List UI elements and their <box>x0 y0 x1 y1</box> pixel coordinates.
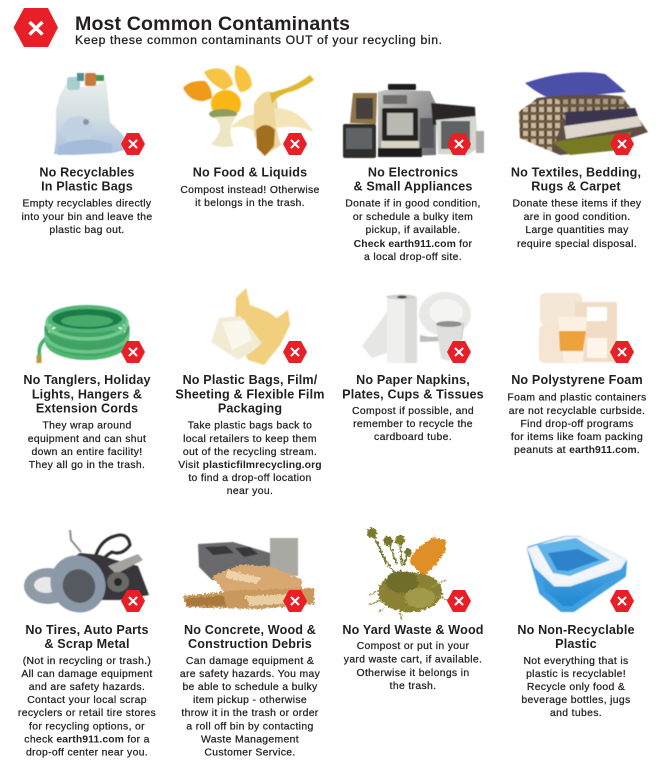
body text <box>345 198 481 263</box>
badge <box>283 590 307 612</box>
body text: Visit plasticfilmrecycling.org <box>178 460 322 471</box>
body text: down an entire facility! <box>32 447 142 458</box>
badge <box>283 133 307 155</box>
body text <box>28 421 146 471</box>
panel: no paper napkins, plates, cups and tissues <box>342 292 484 443</box>
panel: no tanglers, lights, hangers and cords <box>23 307 151 471</box>
body text: Donate these items if they <box>513 198 642 210</box>
body text: drop-off center near you. <box>26 748 148 759</box>
body text: All can damage equipment <box>21 669 153 680</box>
image: inflatable blue kiddie pool <box>529 538 625 609</box>
badge <box>447 590 471 612</box>
heading <box>175 373 325 416</box>
heading: In Plastic Bags <box>41 180 133 194</box>
image: tires and scrap auto parts <box>24 530 149 623</box>
image: coiled green hose <box>36 307 128 363</box>
heading: No Concrete, Wood & <box>184 623 316 637</box>
image: cinder block, brick and wood scraps <box>198 538 298 580</box>
body text: or schedule a bulky item <box>353 212 473 223</box>
body text: be able to schedule a bulky <box>182 682 318 693</box>
heading: Packaging <box>218 402 282 416</box>
heading <box>23 373 151 416</box>
heading: No Polystyrene Foam <box>511 373 643 387</box>
body text: Can damage equipment & <box>186 656 314 667</box>
body text: a local drop-off site. <box>364 252 462 263</box>
badge <box>121 341 145 363</box>
body text: into your bin and leave the <box>21 212 153 223</box>
badge <box>447 341 471 363</box>
heading: No Plastic Bags, Film/ <box>183 373 318 387</box>
badge <box>447 133 471 155</box>
image: paper towel roll, plates and cup <box>362 292 471 363</box>
body text: They wrap around <box>42 421 132 432</box>
body text: Otherwise it belongs in <box>357 668 469 679</box>
body text <box>18 656 156 759</box>
body text: for items like foam packing <box>511 432 643 443</box>
body text <box>352 406 474 443</box>
body text: Waste Management <box>201 735 299 746</box>
badge <box>121 590 145 612</box>
body text: They all go in the trash. <box>29 460 145 471</box>
body text: peanuts at earth911.com. <box>514 445 640 456</box>
panel: no yard waste and wood <box>342 528 484 692</box>
badge <box>610 341 634 363</box>
heading: No Tires, Auto Parts <box>25 623 149 637</box>
body text: Recycle only food & <box>527 682 625 693</box>
heading: No Textiles, Bedding, <box>511 166 641 180</box>
heading <box>517 623 635 651</box>
heading: Construction Debris <box>188 637 312 651</box>
image: grass clippings, weeds and leaf <box>367 528 448 620</box>
body text <box>180 185 320 209</box>
body text: yard waste cart, if available. <box>344 655 482 666</box>
body text: require special disposal. <box>517 239 637 250</box>
body text: beverage bottles, jugs <box>521 695 631 706</box>
panel: no non-recyclable plastic <box>517 538 635 719</box>
image: apple core, orange peels and banana peel <box>183 65 314 156</box>
image: folded blankets with blue pillow <box>519 72 648 155</box>
body text <box>507 393 647 456</box>
body text: pickup, if available. <box>366 225 460 236</box>
image: foam containers and cup <box>539 293 617 364</box>
body text <box>178 421 322 497</box>
body text: for recycling options, or <box>29 722 145 733</box>
heading: Sheeting & Flexible Film <box>175 387 325 401</box>
body text: Donate if in good condition, <box>345 198 481 210</box>
heading: Plates, Cups & Tissues <box>342 387 484 401</box>
body text <box>513 198 642 250</box>
body text: out of the recycling stream. <box>183 447 317 458</box>
body text: recyclers or retail tire stores <box>18 708 156 719</box>
heading: Extension Cords <box>36 402 138 416</box>
heading <box>342 373 484 401</box>
badge <box>283 341 307 363</box>
body text: are in good condition. <box>524 212 630 223</box>
heading: No Paper Napkins, <box>356 373 470 387</box>
body text: (Not in recycling or trash.) <box>23 656 151 667</box>
subtitle: Keep these common contaminants OUT of your recycling bin. <box>75 33 442 47</box>
heading: Plastic <box>555 637 597 651</box>
body text: a roll off bin by contacting <box>186 722 314 733</box>
body text: Compost if possible, and <box>352 406 474 417</box>
panel: no food and liquids <box>180 65 320 209</box>
body text: equipment and can shut <box>28 434 146 445</box>
heading <box>511 166 641 194</box>
header icon: red hexagon with X <box>14 8 58 47</box>
body text: Take plastic bags back to <box>188 421 312 432</box>
panel: no tires, auto parts and scrap metal <box>18 530 156 759</box>
body text: remember to recycle the <box>353 419 473 430</box>
heading: & Scrap Metal <box>44 637 130 651</box>
heading: No Recyclables <box>39 166 135 180</box>
panel: no recyclables in plastic bags <box>21 73 153 236</box>
panel: no plastic bags, film and flexible packaging <box>175 288 325 497</box>
body text: local retailers to keep them <box>183 434 317 445</box>
title: Most Common Contaminants <box>75 13 350 35</box>
body text: Find drop-off programs <box>521 419 633 430</box>
body text: Check earth911.com for <box>354 239 473 250</box>
heading: Rugs & Carpet <box>531 180 621 194</box>
badge <box>610 133 634 155</box>
body text: Empty recyclables directly <box>23 198 152 210</box>
body text: Compost instead! Otherwise <box>180 185 320 196</box>
body text <box>521 656 631 719</box>
body text: to find a drop-off location <box>188 473 312 484</box>
image: crumpled yellow and white plastic bags <box>211 288 290 365</box>
body text <box>344 641 482 692</box>
body text: plastic bag out. <box>49 225 125 236</box>
heading <box>25 623 149 651</box>
body text: check earth911.com for a <box>24 735 150 746</box>
image: wood scraps <box>183 565 314 609</box>
body text: near you. <box>227 486 273 497</box>
panel: no textiles, bedding, rugs and carpet <box>511 72 648 250</box>
body text: it belongs in the trash. <box>195 198 305 209</box>
heading: No Non-Recyclable <box>517 623 635 637</box>
heading <box>184 623 316 651</box>
body text: and tubes. <box>550 708 602 719</box>
body text: Not everything that is <box>523 656 629 667</box>
body text <box>180 656 321 759</box>
panel: no polystyrene foam <box>507 293 647 456</box>
body text: cardboard tube. <box>374 432 452 443</box>
body text: throw it in the trash or order <box>181 708 319 719</box>
heading: & Small Appliances <box>353 180 473 194</box>
body text <box>21 198 153 236</box>
body text: the trash. <box>390 681 436 692</box>
body text: item pickup - otherwise <box>193 695 307 706</box>
panel: no electronics and small appliances <box>343 84 484 263</box>
body text: Compost or put in your <box>357 641 469 652</box>
body text: are not recyclable curbside. <box>509 406 645 417</box>
body text: Contact your local scrap <box>27 695 147 706</box>
body text: and are safety hazards. <box>29 682 145 693</box>
heading <box>353 166 473 194</box>
badge <box>610 590 634 612</box>
badge <box>121 133 145 155</box>
panel: no concrete, wood and construction debris <box>180 538 321 759</box>
body text: Customer Service. <box>204 748 296 759</box>
body text: plastic is recyclable! <box>526 669 626 680</box>
heading: No Yard Waste & Wood <box>342 623 484 637</box>
heading <box>39 166 135 194</box>
heading: Lights, Hangers & <box>32 387 142 401</box>
body text: Large quantities may <box>525 225 629 236</box>
image: white plastic bag of recyclables <box>54 73 125 155</box>
image: pile of old televisions and electronics <box>343 84 484 158</box>
heading: No Electronics <box>368 166 458 180</box>
heading: No Food & Liquids <box>193 166 307 180</box>
body text: are safety hazards. You may <box>180 669 321 680</box>
body text: Foam and plastic containers <box>507 393 647 404</box>
heading: No Tanglers, Holiday <box>23 373 151 387</box>
